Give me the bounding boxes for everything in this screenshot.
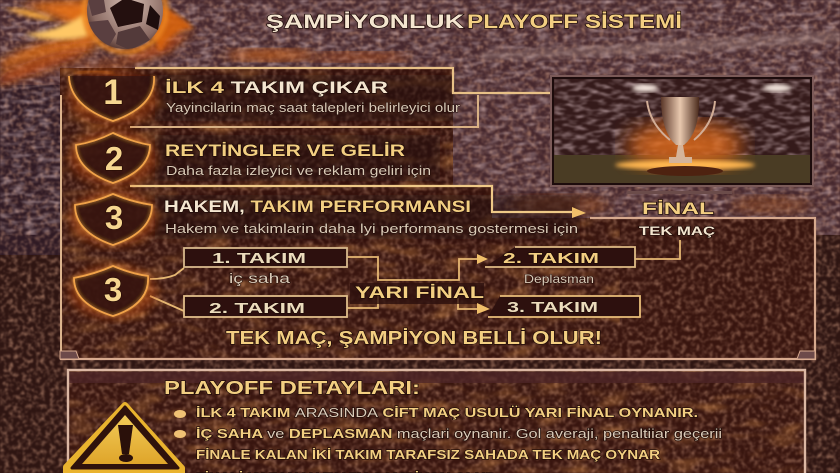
icon: shield 3: 3 <box>105 199 123 236</box>
icon: trophy <box>647 97 715 163</box>
bullet <box>174 410 186 418</box>
icon: flaming football <box>0 0 194 86</box>
list item 1: İLK 4 TAKIM ARASINDA CİFT MAÇ USULÜ YARI FİNAL OYNANIR. <box>196 405 698 420</box>
icon: shield 2: 2 <box>105 140 123 177</box>
icon: shield 1 <box>67 70 159 126</box>
text block: final: FİNAL <box>642 199 714 218</box>
TV stand <box>627 191 732 194</box>
icon: shield semi-final: 3 <box>104 271 122 308</box>
box: 2. Takim: 2. TAKIM <box>209 300 305 317</box>
title: ŞAMPİYONLUK <box>266 12 464 33</box>
icon: shield 2 <box>69 130 157 186</box>
text block: final <box>639 199 715 238</box>
text block: final: TEK MAÇ <box>639 224 715 238</box>
text block: step 3 <box>164 197 578 236</box>
text block: step 1: Yayincilarin maç saat talepleri belirleyici olur <box>166 100 461 115</box>
text block: step 2: REYTİNGLER VE GELİR <box>165 141 405 160</box>
title: PLAYOFF SİSTEMİ <box>467 12 682 33</box>
arrow: to TV <box>553 88 562 99</box>
icon: shield 1: 1 <box>103 73 123 112</box>
arrow: to final <box>572 207 586 218</box>
text block: step 2: Daha fazla izleyici ve reklam geliri için <box>166 163 431 178</box>
label: yarı final <box>350 283 484 304</box>
list item 2: İÇ SAHA ve DEPLASMAN maçlari oynanir. Gol averaji, penaltiiar geçerii <box>196 426 722 441</box>
title <box>266 12 682 33</box>
label: iç saha: iç saha <box>229 270 290 286</box>
label: yarı final: YARI FİNAL <box>355 283 484 302</box>
icon: shield semi-final <box>69 265 157 319</box>
box: 1. Takim: 1. TAKIM <box>212 250 306 267</box>
text block: step 2 <box>165 141 431 178</box>
panel: playoff system frame <box>60 68 815 359</box>
bracket connectors <box>150 240 680 311</box>
heading: playoff details: PLAYOFF DETAYLARI: <box>164 378 420 398</box>
text block: step 3: Hakem ve takimlarin daha lyi performans gostermesi için <box>165 221 578 236</box>
box: 2. Takim away <box>485 247 635 267</box>
arrow: to 2. Takim <box>477 254 488 264</box>
icon: shield 3 <box>69 190 157 246</box>
panel: playoff details <box>66 370 805 473</box>
text block: step 1 <box>165 78 461 115</box>
text block: step 1: İLK 4 TAKIM ÇIKAR <box>165 78 388 97</box>
box: 2. Takim away: 2. TAKIM <box>503 250 599 267</box>
list item 3: FİNALE KALAN İKİ TAKIM TARAFSIZ SAHADA TEK MAÇ OYNAR <box>196 447 661 462</box>
label: Deplasman: Deplasman <box>524 272 594 286</box>
box: 1. Takim <box>184 248 347 267</box>
callout: single match: TEK MAÇ, ŞAMPİYON BELLİ OLUR! <box>226 328 602 348</box>
bullet <box>174 430 186 438</box>
box: 2. Takim <box>184 296 347 317</box>
arrow: to 3. Takim <box>477 303 490 314</box>
TV with trophy <box>551 76 813 194</box>
box: 3. Takim <box>488 296 640 317</box>
icon: warning triangle <box>66 405 182 473</box>
text block: step 3: HAKEM, TAKIM PERFORMANSI <box>164 197 471 216</box>
box: 3. Takim: 3. TAKIM <box>507 299 598 316</box>
